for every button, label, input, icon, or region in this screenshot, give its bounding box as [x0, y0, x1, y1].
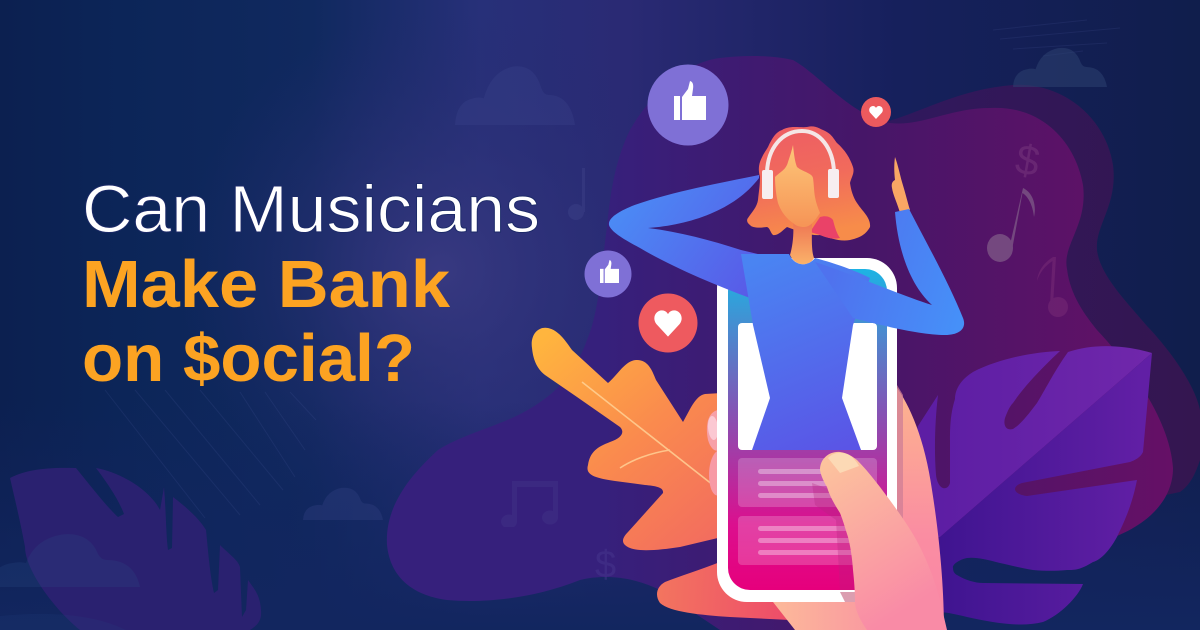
- orange leaf lower piece: [657, 562, 790, 620]
- title line 3: on $ocial?: [82, 321, 415, 396]
- phone body: [717, 258, 897, 602]
- heart bubble small: [861, 97, 891, 127]
- neck: [790, 222, 814, 264]
- ghost cloud top left: [455, 66, 575, 125]
- face: [775, 145, 820, 227]
- heart bubble large: [638, 294, 698, 352]
- palm below phone: [773, 602, 870, 630]
- phone screen: [728, 269, 887, 590]
- headphones: [762, 131, 839, 199]
- purple blob: outer right layer: [870, 85, 1200, 530]
- post card 2: [738, 516, 877, 565]
- thumbnail: [828, 453, 859, 473]
- ghost cloud bottom-left band: [0, 614, 126, 630]
- leaf veins: [582, 382, 713, 485]
- hair: [747, 126, 870, 241]
- ghost dollar left: $: [595, 544, 616, 586]
- phone: [717, 258, 897, 602]
- title line 2: Make Bank: [82, 247, 451, 322]
- profile card: [738, 323, 877, 450]
- orange leaf: [532, 328, 722, 550]
- music note right: [987, 188, 1035, 262]
- purple leaf right: [905, 346, 1152, 625]
- title line 1: Can Musicians: [82, 172, 540, 247]
- thumb: [820, 452, 947, 630]
- left arm: [609, 175, 762, 298]
- purple blob: main: [387, 56, 1173, 630]
- ghost music note bottom: [501, 481, 558, 528]
- fingers behind phone: [707, 410, 720, 496]
- ghost cloud bottom: [303, 488, 383, 520]
- phone shadow strips: [840, 385, 903, 602]
- ghost dollar right: $: [1012, 135, 1043, 185]
- ghost leaf bottom-left: [10, 468, 261, 630]
- ghost cloud far left: [0, 534, 140, 587]
- back of hand: [860, 385, 944, 630]
- faint streak lines: [105, 20, 1120, 518]
- right arm: [815, 209, 964, 335]
- ghost note left: [568, 168, 585, 220]
- faint music note right: [1037, 257, 1068, 317]
- like bubble large: [648, 64, 728, 146]
- ghost cloud top right: [1013, 48, 1107, 87]
- like bubble small: [584, 250, 632, 298]
- post card 1: [738, 458, 877, 507]
- torso: [741, 254, 870, 450]
- title: [82, 172, 540, 396]
- hair magenta accent: [810, 216, 840, 239]
- thumb shadow: [812, 483, 860, 590]
- raised finger: [892, 157, 910, 213]
